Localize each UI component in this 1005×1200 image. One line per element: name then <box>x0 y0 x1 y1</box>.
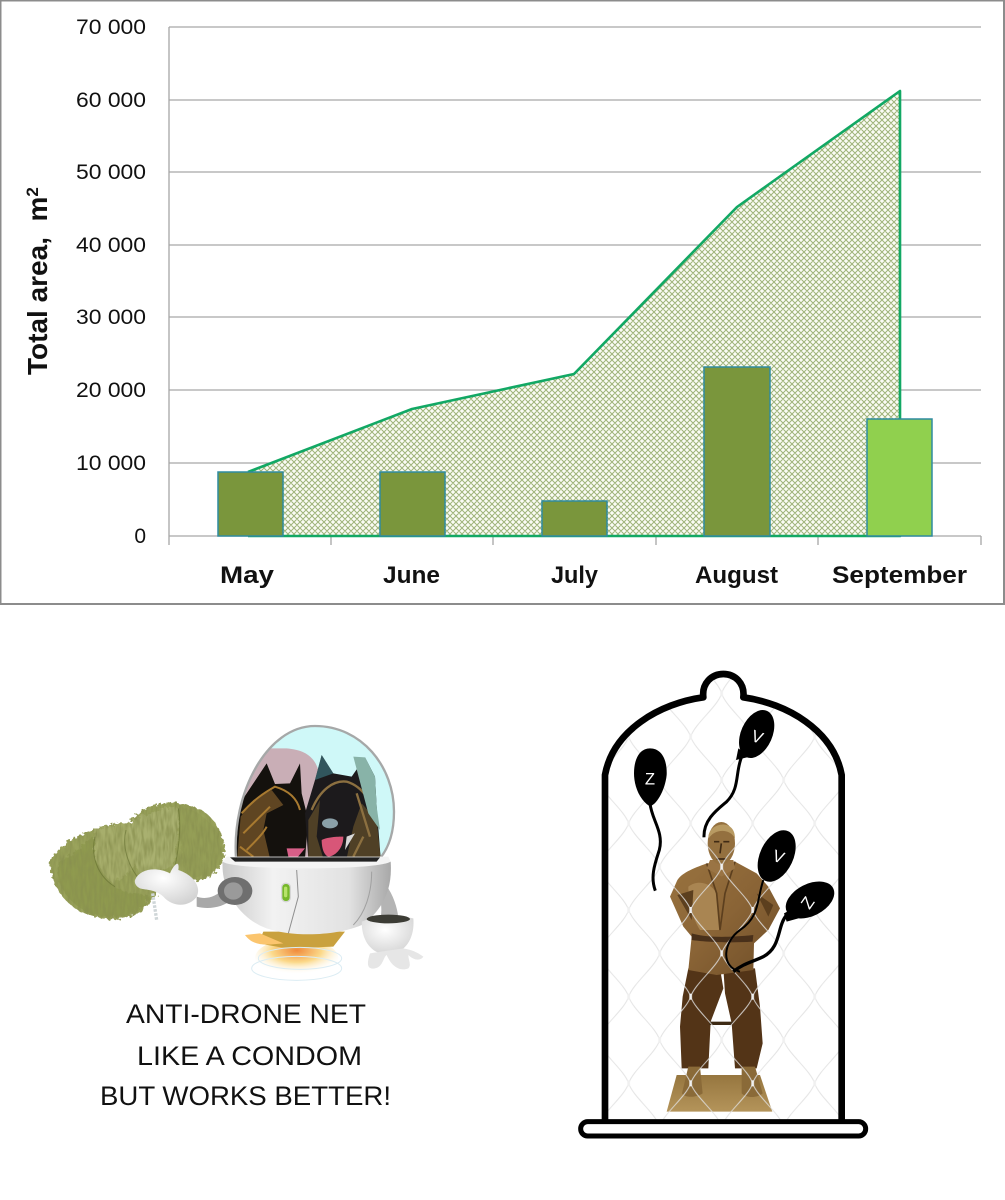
icon: dome with dogs <box>230 726 394 860</box>
statue rear bar <box>709 1022 733 1025</box>
icon: bell base ring <box>581 1122 866 1136</box>
chart frame <box>0 0 1004 604</box>
gridlines <box>169 27 981 545</box>
icon: sperm V middle <box>726 824 803 972</box>
statue arm shadows <box>677 890 773 920</box>
icon: sperm V middle: V <box>770 846 788 868</box>
icon: sperm V top: V <box>749 726 767 748</box>
icon: net mesh <box>605 674 842 1120</box>
icon: left arm and hand <box>135 864 252 920</box>
y-axis tick labels: 40 000 <box>76 234 146 257</box>
illustration: statue under bell-shaped net <box>581 674 866 1136</box>
statue legs <box>680 968 763 1068</box>
bar: May <box>218 472 283 536</box>
statue head <box>707 860 735 877</box>
icon: net bundle <box>50 803 225 919</box>
bar: September <box>867 419 932 536</box>
monthly bars <box>218 367 932 536</box>
x-axis month labels <box>220 562 967 589</box>
cumulative area outline <box>248 91 900 536</box>
bar: July <box>542 501 607 536</box>
statue lapel <box>707 862 735 930</box>
y-axis tick labels: 20 000 <box>76 379 146 402</box>
icon: sperm V top <box>704 704 781 837</box>
caption: anti-drone net slogan: ANTI-DRONE NET <box>126 999 366 1029</box>
x-axis month labels: May <box>220 562 275 589</box>
x-axis month labels: August <box>695 562 778 589</box>
icon: dog two <box>305 755 381 858</box>
icon: sperm Z left <box>634 748 667 891</box>
icon: right foot <box>362 915 423 969</box>
y-axis tick labels: 30 000 <box>76 306 146 329</box>
icon: drone body <box>223 857 391 934</box>
y-axis tick labels: 70 000 <box>76 16 146 39</box>
icon: right leg arm <box>375 882 398 922</box>
caption: anti-drone net slogan: BUT WORKS BETTER! <box>100 1081 391 1111</box>
icon: pink dome backdrop <box>237 748 318 857</box>
icon: thruster flame <box>245 932 345 980</box>
icon: statue <box>667 822 780 1112</box>
y-axis tick labels: 50 000 <box>76 161 146 184</box>
x-axis month labels: July <box>551 562 599 589</box>
caption: anti-drone net slogan <box>100 999 391 1111</box>
cumulative area series <box>248 91 900 536</box>
statue pedestal <box>667 1075 772 1112</box>
icon: bell outline <box>605 674 842 1120</box>
statue feet <box>682 1067 763 1097</box>
panel: area and bar chart <box>0 0 1004 604</box>
statue jacket <box>670 862 780 975</box>
statue chest highlight <box>688 883 720 930</box>
x-axis month labels: September <box>832 562 967 589</box>
icon: net bundle bands <box>94 808 180 887</box>
y-axis tick labels: 10 000 <box>76 452 146 475</box>
y-axis tick labels <box>76 16 146 548</box>
y-axis tick labels: 0 <box>134 525 146 548</box>
y-axis tick labels: 60 000 <box>76 89 146 112</box>
icon: sperm Z left: Z <box>645 769 655 788</box>
caption: anti-drone net slogan: LIKE A CONDOM <box>137 1041 362 1071</box>
icon: dog one <box>235 763 308 858</box>
bar: June <box>380 472 445 536</box>
statue belt <box>692 933 753 942</box>
icon: sperm N right: Z <box>797 893 819 912</box>
icon: sperm N right <box>733 874 840 972</box>
illustration: drone grabbing net bundle <box>50 726 423 980</box>
y-axis title: Total area, m <box>22 197 53 375</box>
x-axis month labels: June <box>383 562 440 589</box>
y-axis title: 2 <box>23 187 42 197</box>
bar: August <box>704 367 770 536</box>
